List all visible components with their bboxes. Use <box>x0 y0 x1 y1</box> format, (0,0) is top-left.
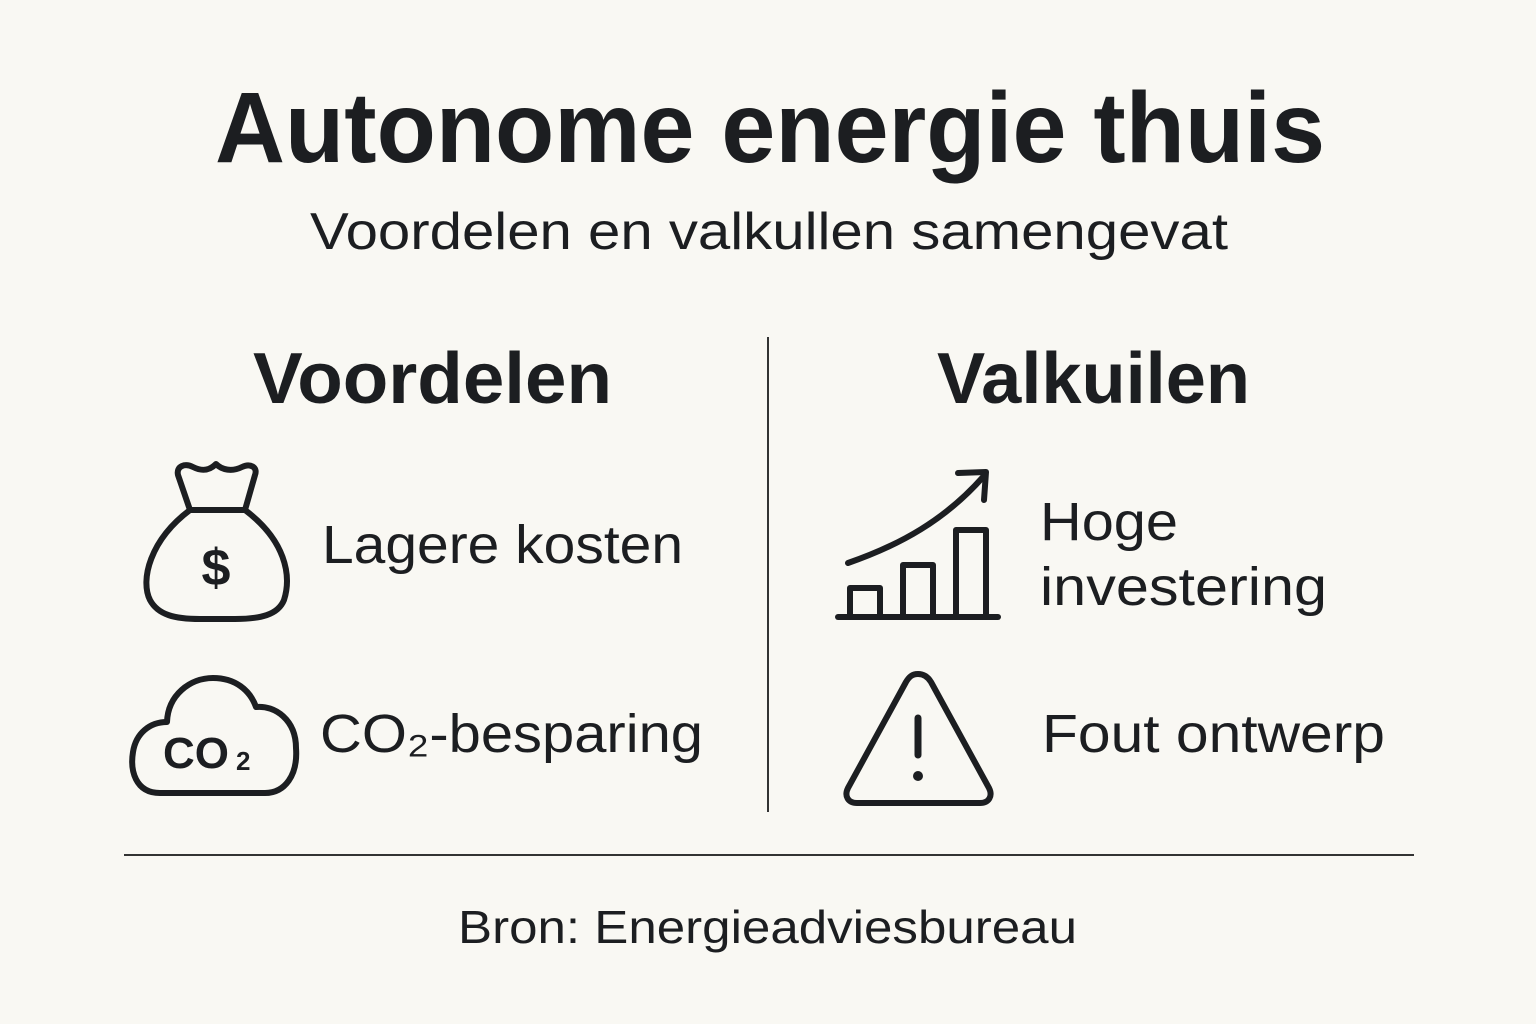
subtitle: Voordelen en valkullen samengevat <box>310 203 1229 261</box>
title: Autonome energie thuis <box>215 72 1325 184</box>
text: Hoge investering: investering <box>1040 557 1327 617</box>
icon: CO2 cloud: 2 <box>236 746 250 776</box>
panel: voordelen <box>132 339 703 793</box>
source: Bron: Energieadviesbureau <box>458 901 1077 953</box>
icon: money bag: $ <box>202 539 231 597</box>
text: Lagere kosten: Lagere kosten <box>322 515 683 575</box>
icon: CO2 cloud: CO <box>163 729 229 778</box>
text: CO2-besparing: CO₂-besparing <box>320 704 703 764</box>
icon: rising chart <box>838 472 998 617</box>
heading: Valkuilen: Valkuilen <box>937 339 1250 419</box>
panel: valkuilen <box>838 339 1385 803</box>
text: Hoge investering <box>1040 492 1327 617</box>
icon: CO2 cloud <box>132 678 296 793</box>
heading: Voordelen: Voordelen <box>253 339 612 419</box>
icon: warning triangle <box>846 674 991 803</box>
text: Fout ontwerp: Fout ontwerp <box>1042 704 1385 764</box>
icon: money bag <box>146 464 287 619</box>
text: Hoge investering: Hoge <box>1040 492 1178 552</box>
